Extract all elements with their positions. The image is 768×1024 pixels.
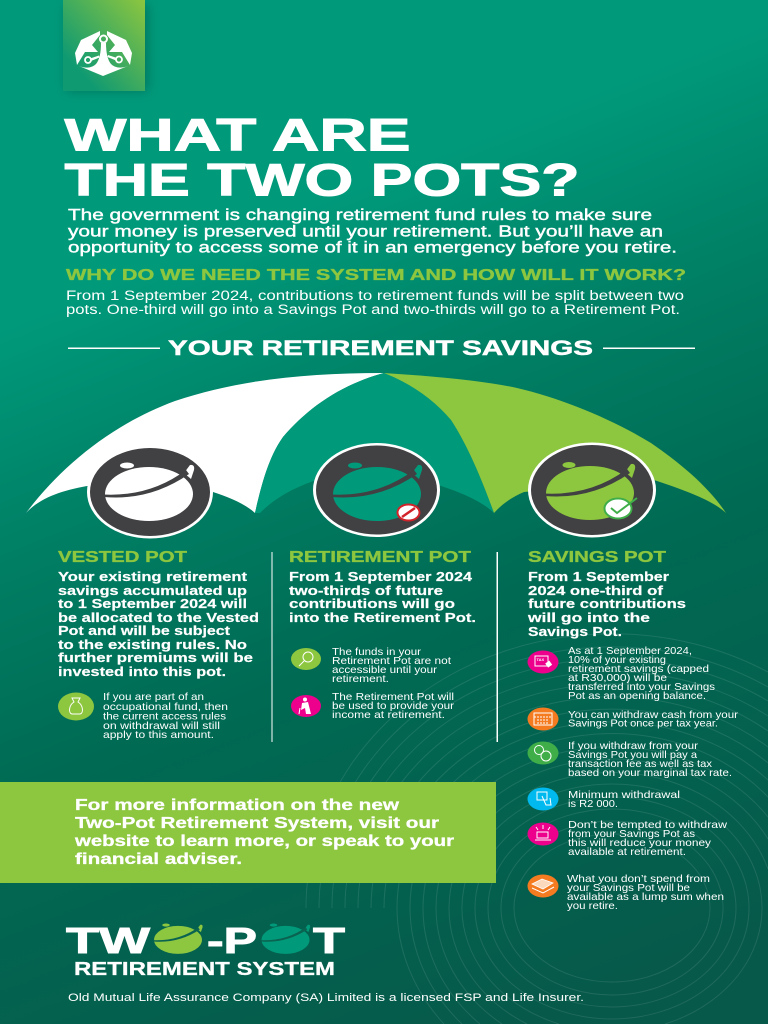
text block: lump sum: available as a lump sum when xyxy=(567,892,724,903)
icon: savings pot with check badge xyxy=(528,442,656,538)
subheading: why do we need the system: WHY DO WE NEED THE SYSTEM AND HOW WILL IT WORK? xyxy=(66,267,686,284)
text block: occupational fund note: If you are part of an xyxy=(103,692,204,703)
icon: money bag xyxy=(58,692,94,720)
text block: occupational fund note xyxy=(103,692,228,741)
logo: two-pot retirement system: TW xyxy=(66,920,150,961)
text block: fees and tax: If you withdraw from your xyxy=(568,741,699,752)
text block: retirement pot description: contributions will go xyxy=(289,596,455,611)
icon: coins xyxy=(528,742,558,764)
icon: prohibition badge xyxy=(398,504,420,520)
icon: lime pot letter O xyxy=(153,924,203,954)
umbrella panel: white vested xyxy=(26,373,384,513)
text block: opening balance: Pot as an opening balance. xyxy=(568,691,706,702)
text block: savings pot description: 2024 one-third of xyxy=(528,583,664,598)
footer disclaimer: Old Mutual Life Assurance Company (SA) Limited is a licensed FSP and Life Insurer. xyxy=(68,992,584,1004)
text block: lump sum: your Savings Pot will be xyxy=(567,883,690,894)
heading: savings pot: SAVINGS POT xyxy=(528,549,667,566)
icon: calendar xyxy=(528,708,558,730)
text block: income at retirement: be used to provide your xyxy=(332,701,455,712)
explanatory paragraph: From 1 September 2024, contributions to retirement funds will be split between two xyxy=(66,288,684,303)
text block: opening balance: at R30,000) will be xyxy=(568,673,667,684)
text block: vested pot description: Pot and will be subject xyxy=(58,623,231,638)
icon: tax document xyxy=(528,650,558,674)
text block: withdraw once per tax year: You can withdraw cash from your xyxy=(568,710,739,721)
text block: lump sum: What you don’t spend from xyxy=(567,874,710,885)
intro text: The government is changing retirement fund rules to make sure xyxy=(68,207,652,224)
text block: do not be tempted xyxy=(568,820,728,858)
text block: funds not accessible: accessible until your xyxy=(332,665,438,676)
text block: opening balance xyxy=(568,646,715,702)
icon: retirement pot with prohibition badge xyxy=(313,443,440,537)
icon: vested pot xyxy=(87,446,213,538)
icon: elderly person xyxy=(291,695,321,717)
text block: retirement pot description: From 1 September 2024 xyxy=(289,569,473,584)
text block: opening balance: As at 1 September 2024, xyxy=(568,646,692,657)
callout: more information banner: Two-Pot Retirement System, visit our xyxy=(75,815,439,832)
text block: vested pot description: to the existing rules. No xyxy=(58,637,247,652)
umbrella canopy xyxy=(26,373,726,513)
text block: opening balance: transferred into your Savings xyxy=(568,682,715,693)
text block: do not be tempted: this will reduce your money xyxy=(568,838,712,849)
intro text xyxy=(68,207,677,256)
title: THE TWO POTS? xyxy=(64,154,580,206)
text block: vested pot description: be allocated to the Vested xyxy=(58,610,259,625)
umbrella panel: teal retirement xyxy=(255,373,494,513)
text block: savings pot description: future contributions xyxy=(528,596,686,611)
text block: funds not accessible xyxy=(332,647,451,685)
text block: opening balance: 10% of your existing xyxy=(568,655,666,666)
text block: do not be tempted: available at retirement. xyxy=(568,847,686,858)
icon: Old Mutual anchor and keys emblem xyxy=(75,31,132,76)
intro text: your money is preserved until your retirement. But you’ll have an xyxy=(68,224,663,240)
text block: vested pot description: further premiums will be xyxy=(58,650,253,665)
logo: two-pot retirement system: RETIREMENT SYSTEM xyxy=(74,958,335,979)
text block: income at retirement: income at retirement. xyxy=(332,710,445,721)
panel: vested pot xyxy=(58,549,259,741)
explanatory paragraph: pots. One-third will go into a Savings Pot and two-thirds will go to a Retirement Pot. xyxy=(66,302,680,317)
text block: minimum withdrawal: is R2 000. xyxy=(568,799,618,810)
text block: vested pot description: to 1 September 2024 will xyxy=(58,596,247,611)
text block: occupational fund note: occupational fund, then xyxy=(103,702,228,713)
text block: fees and tax xyxy=(568,741,732,779)
icon: stacks of cash xyxy=(528,874,558,898)
text block: retirement pot description xyxy=(289,569,476,625)
text block: withdraw once per tax year: Savings Pot once per tax year. xyxy=(568,718,718,730)
text block: lump sum: you retire. xyxy=(567,901,618,912)
text block: fees and tax: Savings Pot you will pay a xyxy=(568,750,697,761)
umbrella panel: green savings xyxy=(384,373,726,513)
text block: opening balance: retirement savings (capped xyxy=(568,664,709,675)
logo: two-pot retirement system xyxy=(66,920,345,979)
text block: lump sum xyxy=(567,874,724,912)
callout: more information banner xyxy=(0,782,496,883)
explanatory paragraph xyxy=(66,288,684,317)
text block: fees and tax: transaction fee as well as tax xyxy=(568,759,713,770)
title xyxy=(64,110,580,206)
logo: two-pot retirement system: T xyxy=(313,920,345,961)
icon: tax document: TAX xyxy=(536,657,545,662)
icon: teal pot letter O xyxy=(260,924,310,954)
text block: funds not accessible: retirement. xyxy=(332,674,389,685)
panel: savings pot xyxy=(527,549,739,912)
text block: occupational fund note: on withdrawal will still xyxy=(103,721,220,732)
text block: retirement pot description: into the Retirement Pot. xyxy=(289,610,476,625)
text block: income at retirement: The Retirement Pot will xyxy=(332,692,454,703)
text block: occupational fund note: apply to this amount. xyxy=(103,730,214,741)
callout: more information banner: website to learn more, or speak to your xyxy=(74,833,454,850)
panel: retirement pot xyxy=(289,549,476,721)
text block: minimum withdrawal xyxy=(568,790,680,810)
text block: minimum withdrawal: Minimum withdrawal xyxy=(568,790,680,801)
text block: income at retirement xyxy=(332,692,455,721)
text block: vested pot description: invested into this pot. xyxy=(58,664,226,679)
logo: two-pot retirement system: -P xyxy=(207,920,257,961)
icon: check badge xyxy=(604,498,637,518)
column dividers xyxy=(272,552,498,742)
icon: alarm bell xyxy=(528,822,558,846)
text block: vested pot description xyxy=(58,569,259,679)
text block: vested pot description: savings accumulated up xyxy=(58,583,247,598)
text block: do not be tempted: from your Savings Pot as xyxy=(568,829,695,840)
text block: savings pot description: From 1 September xyxy=(528,569,669,584)
text block: occupational fund note: the current access rules xyxy=(103,712,226,722)
intro text: opportunity to access some of it in an emergency before you retire. xyxy=(68,240,677,256)
heading: vested pot: VESTED POT xyxy=(58,549,188,566)
heading: retirement pot: RETIREMENT POT xyxy=(289,549,472,566)
logo badge xyxy=(63,0,148,91)
text block: savings pot description: will go into the xyxy=(527,610,650,625)
text block: retirement pot description: two-thirds of future xyxy=(289,583,443,598)
text block: funds not accessible: Retirement Pot are not xyxy=(332,656,451,667)
text block: do not be tempted: Don’t be tempted to withdraw xyxy=(568,820,728,831)
title: WHAT ARE xyxy=(64,110,410,160)
icon: magnifying glass xyxy=(291,648,321,670)
text block: funds not accessible: The funds in your xyxy=(332,647,422,658)
text block: savings pot description xyxy=(527,569,686,639)
section heading: your retirement savings: YOUR RETIREMENT SAVINGS xyxy=(168,337,593,360)
text block: savings pot description: Savings Pot. xyxy=(528,624,622,639)
text block: fees and tax: based on your marginal tax rate. xyxy=(568,768,732,779)
callout: more information banner: financial adviser. xyxy=(75,851,242,868)
icon: hand and banknote xyxy=(528,788,558,810)
text block: vested pot description: Your existing retirement xyxy=(58,569,248,584)
callout: more information banner: For more information on the new xyxy=(75,797,400,814)
text block: withdraw once per tax year xyxy=(568,710,739,730)
